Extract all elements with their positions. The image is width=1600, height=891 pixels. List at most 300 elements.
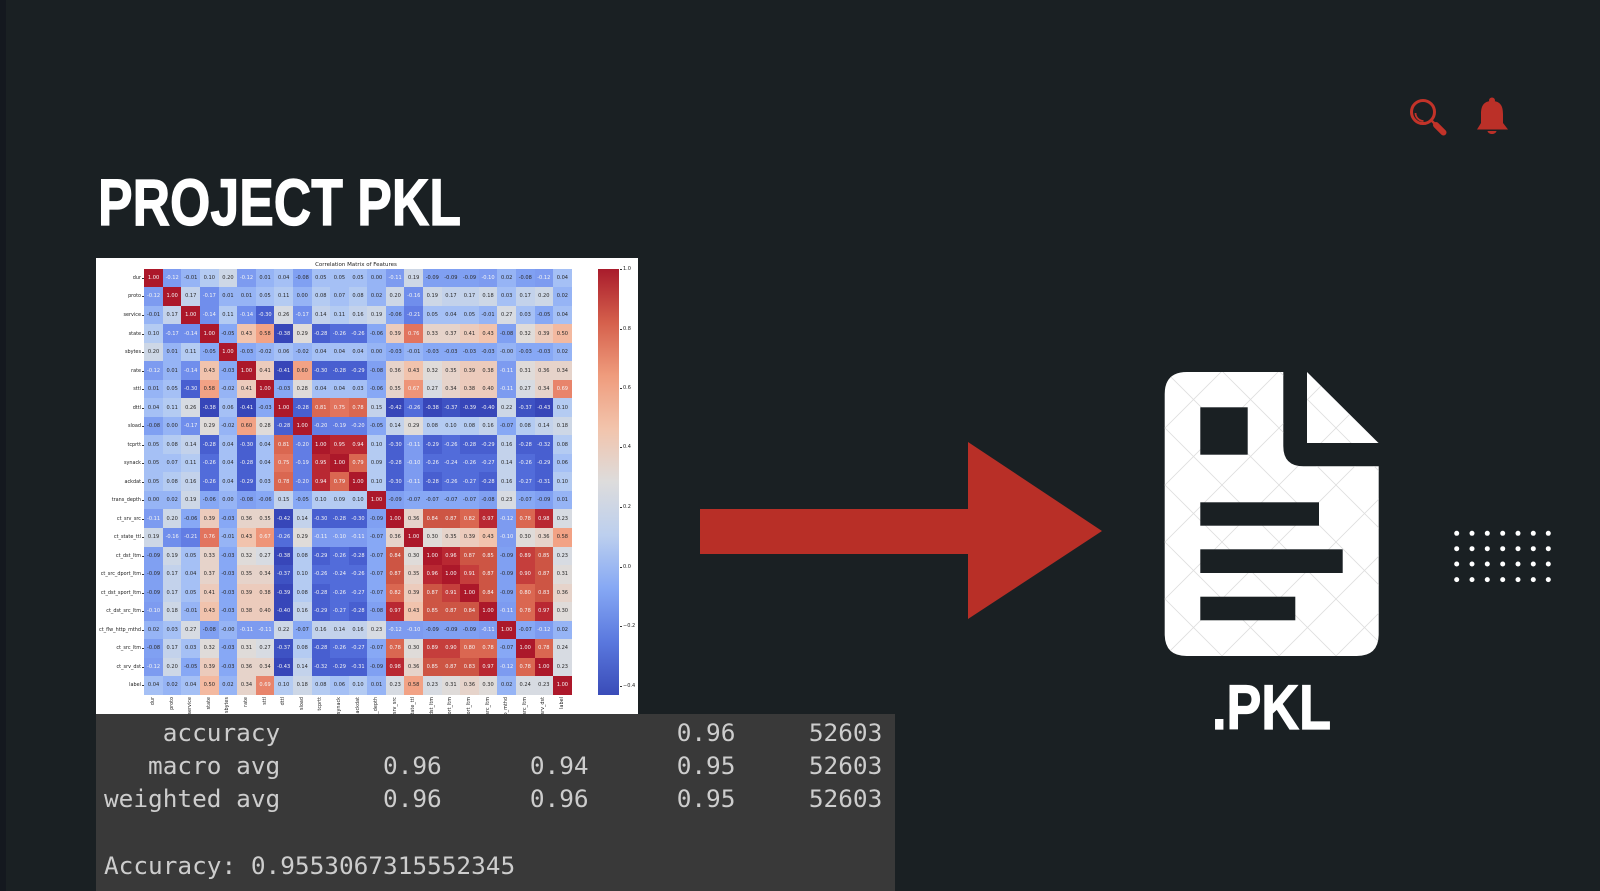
heatmap cells: 0.05 <box>185 553 196 559</box>
heatmap cells: 0.16 <box>501 479 512 485</box>
icon: pkl document <box>1164 372 1379 656</box>
heatmap cells: 0.14 <box>185 442 196 448</box>
heatmap cells: 0.09 <box>334 497 345 503</box>
heatmap cells: 0.04 <box>334 386 345 392</box>
heatmap cells: -0.09 <box>147 590 160 596</box>
heatmap cells: 0.18 <box>166 608 178 614</box>
heatmap cells: 0.08 <box>297 553 308 559</box>
colorbar ticks: 1.0 <box>623 266 631 272</box>
heatmap cells: 0.50 <box>557 330 568 336</box>
heatmap cells: -0.26 <box>277 534 290 540</box>
heatmap cells: 1.00 <box>148 275 159 281</box>
heatmap cells: 0.36 <box>389 534 401 540</box>
heatmap cells: 0.27 <box>259 645 271 651</box>
heatmap cells: 0.10 <box>445 423 457 429</box>
heatmap cells: 0.75 <box>334 405 345 411</box>
heatmap cells: -0.08 <box>481 497 495 503</box>
heatmap cells: -0.08 <box>240 497 253 503</box>
heatmap cells: 0.16 <box>482 423 494 429</box>
row labels: ct_flw_http_mthd <box>99 627 141 633</box>
heatmap cells: 0.84 <box>464 608 475 614</box>
heatmap cells: 0.08 <box>520 423 531 429</box>
heatmap cells: 0.04 <box>278 275 289 281</box>
heatmap cells: 0.17 <box>166 312 178 318</box>
chart title: Correlation Matrix of Features <box>315 262 397 268</box>
heatmap cells: 0.06 <box>278 349 289 355</box>
heatmap cells: 0.36 <box>538 534 549 540</box>
heatmap cells: -0.10 <box>147 608 160 614</box>
heatmap cells: -0.01 <box>184 608 197 614</box>
heatmap cells: 1.00 <box>185 312 196 318</box>
heatmap cells: 0.27 <box>427 386 438 392</box>
colorbar ticks: 0.8 <box>623 326 631 332</box>
heatmap cells: 0.11 <box>278 293 289 299</box>
row labels: state <box>129 330 141 336</box>
heatmap cells: 0.08 <box>315 293 326 299</box>
heatmap cells: -0.42 <box>389 405 402 411</box>
heatmap cells: 0.11 <box>185 349 196 355</box>
heatmap cells: -0.05 <box>203 349 216 355</box>
heatmap cells: 0.87 <box>445 664 457 670</box>
heatmap cells: 1.00 <box>204 330 215 336</box>
heatmap cells: -0.17 <box>184 423 197 429</box>
heatmap cells: 0.32 <box>241 553 252 559</box>
heatmap cells: -0.28 <box>203 442 216 448</box>
heatmap cells: 0.84 <box>482 590 494 596</box>
heatmap cells: -0.06 <box>184 516 197 522</box>
heatmap cells: 0.39 <box>408 590 419 596</box>
heatmap cells: 0.24 <box>520 682 531 688</box>
heatmap cells: -0.07 <box>444 497 457 503</box>
heatmap cells: -0.09 <box>463 275 476 281</box>
heatmap cells: 0.82 <box>389 590 401 596</box>
heatmap cells: -0.07 <box>296 627 309 633</box>
heatmap cells: 0.05 <box>334 275 345 281</box>
heatmap cells: 0.19 <box>185 497 196 503</box>
heatmap cells: -0.26 <box>407 405 420 411</box>
heatmap cells: 0.31 <box>520 368 531 374</box>
heatmap cells: -0.30 <box>314 368 327 374</box>
heatmap cells: 0.20 <box>538 293 549 299</box>
heatmap cells: 0.43 <box>408 608 419 614</box>
heatmap cells: 0.26 <box>185 405 196 411</box>
heatmap cells: 0.16 <box>315 627 326 633</box>
heatmap cells: -0.07 <box>370 571 383 577</box>
heatmap cells: 0.20 <box>166 664 178 670</box>
heatmap cells: 0.05 <box>166 386 178 392</box>
heatmap cells: 0.87 <box>427 590 438 596</box>
heatmap cells: 0.04 <box>148 405 159 411</box>
heatmap cells: -0.37 <box>277 645 290 651</box>
heatmap cells: 0.78 <box>520 664 531 670</box>
heatmap cells: -0.03 <box>221 664 234 670</box>
heatmap cells: 0.36 <box>241 664 252 670</box>
heatmap cells: 0.39 <box>538 330 549 336</box>
heatmap cells: 0.19 <box>166 553 178 559</box>
heatmap cells: 0.14 <box>334 627 345 633</box>
colorbar ticks: 0.4 <box>623 444 631 450</box>
heatmap cells: 0.17 <box>520 293 531 299</box>
heatmap cells: -0.30 <box>351 516 365 522</box>
heatmap cells: -0.39 <box>463 405 476 411</box>
row labels: proto <box>128 293 141 299</box>
heatmap cells: 0.32 <box>204 645 215 651</box>
heatmap cells: 0.03 <box>520 312 531 318</box>
heatmap cells: 1.00 <box>259 386 271 392</box>
heatmap cells: -0.03 <box>221 608 234 614</box>
heatmap cells: 0.04 <box>352 349 364 355</box>
heatmap cells: -0.03 <box>463 349 476 355</box>
heatmap cells: 0.17 <box>185 293 196 299</box>
heatmap cells: 0.04 <box>557 275 568 281</box>
heatmap cells: -0.28 <box>351 553 365 559</box>
heatmap cells: 0.01 <box>148 386 159 392</box>
heatmap cells: -0.21 <box>184 534 197 540</box>
heatmap cells: -0.26 <box>351 330 365 336</box>
heatmap cells: -0.01 <box>147 312 160 318</box>
heatmap cells: -0.11 <box>314 534 327 540</box>
heatmap cells: 1.00 <box>557 682 568 688</box>
heatmap cells: 0.30 <box>557 608 568 614</box>
heatmap cells: 0.00 <box>371 349 382 355</box>
heatmap cells: 0.10 <box>352 497 364 503</box>
row labels: ackdat <box>124 479 141 485</box>
row labels: tcprtt <box>127 442 141 448</box>
heatmap cells: 0.31 <box>241 645 252 651</box>
row labels: ct_srv_dst <box>116 664 141 670</box>
heatmap cells: 0.16 <box>352 627 364 633</box>
heatmap cells: 0.04 <box>334 349 345 355</box>
heatmap cells: 0.39 <box>464 534 475 540</box>
heatmap cells: 0.26 <box>278 312 289 318</box>
heatmap cells: -0.40 <box>277 608 290 614</box>
heatmap cells: -0.09 <box>500 553 513 559</box>
heatmap cells: 0.58 <box>408 682 419 688</box>
heatmap cells: -0.09 <box>426 275 439 281</box>
heatmap cells: 0.03 <box>259 479 271 485</box>
heatmap cells: -0.08 <box>147 645 160 651</box>
heatmap cells: 0.04 <box>557 312 568 318</box>
heatmap cells: -0.29 <box>314 608 327 614</box>
heatmap cells: 0.84 <box>427 516 438 522</box>
heatmap cells: 0.43 <box>241 534 252 540</box>
heatmap cells: -0.28 <box>296 405 309 411</box>
heatmap cells: 0.05 <box>315 275 326 281</box>
heatmap cells: 0.16 <box>501 442 512 448</box>
heatmap cells: 0.23 <box>538 682 549 688</box>
column labels: proto <box>169 697 175 710</box>
heatmap cells: 0.11 <box>222 312 234 318</box>
heatmap cells: -0.03 <box>277 386 290 392</box>
heatmap cells: -0.12 <box>166 275 179 281</box>
heatmap cells: 1.00 <box>389 516 401 522</box>
heatmap cells: 0.04 <box>445 312 457 318</box>
heatmap cells: 0.32 <box>520 330 531 336</box>
heatmap cells: 0.38 <box>464 386 475 392</box>
heatmap cells: 0.37 <box>204 571 215 577</box>
heatmap cells: 0.78 <box>278 479 289 485</box>
heatmap cells: 0.43 <box>204 368 215 374</box>
heatmap cells: 0.58 <box>204 386 215 392</box>
heatmap cells: -0.03 <box>221 516 234 522</box>
heatmap cells: 0.17 <box>445 293 457 299</box>
heatmap cells: 0.41 <box>259 368 271 374</box>
heatmap cells: 1.00 <box>482 608 494 614</box>
heatmap cells: 0.78 <box>352 405 364 411</box>
heatmap cells: 0.83 <box>538 590 549 596</box>
heatmap cells: -0.01 <box>221 534 234 540</box>
heatmap cells: -0.05 <box>537 312 550 318</box>
heatmap cells: -0.29 <box>333 664 346 670</box>
heatmap cells: -0.12 <box>147 368 160 374</box>
decorative dot grid <box>1454 530 1551 582</box>
heatmap cells: 0.35 <box>445 534 457 540</box>
heatmap cells: -0.38 <box>203 405 216 411</box>
heatmap cells: 0.08 <box>557 442 568 448</box>
heatmap cells: 0.67 <box>259 534 271 540</box>
heatmap cells: -0.17 <box>296 312 309 318</box>
heatmap cells: -0.03 <box>537 349 550 355</box>
heatmap cells: -0.03 <box>258 405 272 411</box>
heatmap cells: 0.81 <box>278 442 289 448</box>
heatmap cells: -0.28 <box>389 460 402 466</box>
heatmap cells: -0.06 <box>258 497 272 503</box>
heatmap cells: -0.30 <box>389 442 402 448</box>
heatmap cells: 0.00 <box>148 497 159 503</box>
heatmap cells: 0.80 <box>464 645 475 651</box>
heatmap cells: 0.09 <box>371 460 382 466</box>
column labels: rate <box>243 697 249 707</box>
heatmap cells: 0.87 <box>464 553 475 559</box>
heatmap cells: 0.20 <box>148 349 159 355</box>
heatmap cells: 0.02 <box>557 627 568 633</box>
heatmap cells: 0.43 <box>482 534 494 540</box>
heatmap cells: 0.22 <box>278 627 289 633</box>
heatmap cells: -0.10 <box>500 534 513 540</box>
heatmap cells: 0.36 <box>241 516 252 522</box>
heatmap cells: 0.87 <box>482 571 494 577</box>
heatmap cells: -0.29 <box>351 368 365 374</box>
heatmap cells: 0.85 <box>482 553 494 559</box>
heatmap cells: -0.14 <box>184 330 197 336</box>
heatmap cells: -0.07 <box>500 423 513 429</box>
heatmap cells: -0.26 <box>203 479 216 485</box>
heatmap cells: 0.36 <box>538 368 549 374</box>
heatmap cells: 0.98 <box>389 664 401 670</box>
heatmap cells: 0.04 <box>315 349 326 355</box>
heatmap cells: 0.04 <box>222 479 234 485</box>
left edge strip <box>0 0 6 891</box>
heatmap cells: 0.01 <box>166 349 178 355</box>
heatmap cells: -0.41 <box>277 368 290 374</box>
heatmap cells: 0.20 <box>166 516 178 522</box>
heatmap cells: 0.05 <box>185 590 196 596</box>
heatmap cells: -0.12 <box>537 627 550 633</box>
heatmap cells: -0.09 <box>500 590 513 596</box>
heatmap cells: 0.38 <box>482 368 494 374</box>
heatmap cells: 0.00 <box>297 293 308 299</box>
row labels: sttl <box>133 386 141 392</box>
heatmap cells: 0.04 <box>259 442 271 448</box>
heatmap cells: -0.28 <box>333 516 346 522</box>
heatmap cells: 0.19 <box>371 312 382 318</box>
row labels: ct_dst_ltm <box>116 553 141 559</box>
heatmap cells: 0.89 <box>520 553 531 559</box>
heatmap cells: -0.07 <box>370 553 383 559</box>
heatmap cells: -0.03 <box>444 349 457 355</box>
heatmap cells: 1.00 <box>427 553 438 559</box>
heatmap cells: -0.37 <box>519 405 532 411</box>
heatmap cells: 0.17 <box>464 293 475 299</box>
heatmap cells: -0.28 <box>314 645 327 651</box>
column labels: dur <box>150 697 156 705</box>
heatmap cells: 0.23 <box>557 664 568 670</box>
heatmap cells: 0.29 <box>408 423 419 429</box>
colorbar ticks: 0.0 <box>623 564 631 570</box>
heatmap cells: -0.00 <box>221 627 234 633</box>
heatmap cells: -0.29 <box>240 479 253 485</box>
heatmap cells: -0.08 <box>519 275 532 281</box>
heatmap cells: -0.06 <box>370 330 383 336</box>
heatmap cells: 0.08 <box>427 423 438 429</box>
heatmap cells: 0.08 <box>166 479 178 485</box>
heatmap cells: -0.07 <box>370 534 383 540</box>
colorbar ticks <box>620 266 635 689</box>
row labels: ct_src_ltm <box>116 645 141 651</box>
heatmap cells: -0.11 <box>500 368 513 374</box>
heatmap cells: 0.34 <box>538 386 549 392</box>
heatmap cells: 0.05 <box>148 442 159 448</box>
colorbar ticks: 0.2 <box>623 504 631 510</box>
heatmap cells: 0.00 <box>166 423 178 429</box>
arrow <box>700 442 1102 619</box>
heatmap cells: 0.30 <box>427 534 438 540</box>
heatmap cells: -0.26 <box>351 571 365 577</box>
heatmap cells: 0.07 <box>334 293 345 299</box>
heatmap cells: -0.20 <box>296 442 309 448</box>
heatmap cells: 0.30 <box>482 682 494 688</box>
heatmap cells: -0.12 <box>537 275 550 281</box>
heatmap cells: 0.10 <box>148 330 159 336</box>
heatmap cells: 0.04 <box>315 386 326 392</box>
heatmap cells: 0.76 <box>204 534 215 540</box>
heatmap cells: 0.78 <box>538 645 549 651</box>
heatmap cells: 0.10 <box>278 682 289 688</box>
heatmap cells: -0.07 <box>426 497 439 503</box>
heatmap cells: 0.83 <box>464 664 475 670</box>
heatmap cells: 0.36 <box>389 368 401 374</box>
heatmap cells: 1.00 <box>371 497 382 503</box>
heatmap cells: 0.23 <box>557 553 568 559</box>
heatmap cells <box>144 269 572 695</box>
heatmap cells: -0.38 <box>277 553 290 559</box>
heatmap cells: -0.09 <box>389 497 402 503</box>
column labels: dttl <box>280 697 286 705</box>
heatmap cells: 0.02 <box>166 682 178 688</box>
colorbar ticks: −0.2 <box>623 623 635 629</box>
heatmap cells: 0.76 <box>408 330 419 336</box>
heatmap cells: -0.17 <box>166 330 179 336</box>
heatmap cells: 0.10 <box>557 405 568 411</box>
heatmap cells: -0.30 <box>184 386 197 392</box>
heatmap cells: -0.12 <box>389 627 402 633</box>
heatmap cells: -0.11 <box>407 479 420 485</box>
heatmap cells: 0.16 <box>352 312 364 318</box>
heatmap cells: -0.28 <box>519 442 532 448</box>
row labels: ct_src_dport_ltm <box>101 571 141 577</box>
heatmap cells: -0.17 <box>203 293 216 299</box>
heatmap cells: -0.27 <box>333 608 346 614</box>
row labels: dur <box>133 275 141 281</box>
heatmap cells: -0.01 <box>184 275 197 281</box>
heatmap cells: -0.29 <box>537 460 550 466</box>
heatmap cells: 0.01 <box>166 368 178 374</box>
heatmap cells: 0.14 <box>315 312 326 318</box>
heatmap cells: -0.24 <box>444 460 457 466</box>
heatmap cells: 0.02 <box>501 275 512 281</box>
heatmap cells: -0.28 <box>333 368 346 374</box>
heatmap cells: 0.04 <box>259 460 271 466</box>
heatmap cells: -0.03 <box>221 571 234 577</box>
row labels: sload <box>128 423 141 429</box>
heatmap cells: -0.10 <box>407 627 420 633</box>
heatmap cells: 1.00 <box>241 368 252 374</box>
heatmap cells: 0.78 <box>520 608 531 614</box>
heatmap cells: 0.08 <box>464 423 475 429</box>
heatmap cells: -0.09 <box>370 664 383 670</box>
heatmap cells: 0.19 <box>408 275 419 281</box>
heatmap cells: 0.18 <box>482 293 494 299</box>
heatmap cells: 0.98 <box>538 516 549 522</box>
heatmap cells: 0.18 <box>297 682 308 688</box>
heatmap cells: -0.09 <box>147 553 160 559</box>
heatmap cells: 0.90 <box>520 571 531 577</box>
heatmap cells: 0.23 <box>371 627 382 633</box>
heatmap cells: -0.07 <box>407 497 420 503</box>
heatmap cells: 0.11 <box>166 405 178 411</box>
heatmap cells: -0.28 <box>277 423 290 429</box>
heatmap cells: 0.91 <box>445 590 457 596</box>
heatmap cells: 1.00 <box>445 571 457 577</box>
heatmap cells: -0.26 <box>426 460 439 466</box>
heatmap cells: -0.11 <box>240 627 253 633</box>
heatmap cells: 0.08 <box>297 645 308 651</box>
heatmap cells: -0.26 <box>444 479 457 485</box>
heatmap cells: 0.02 <box>371 293 382 299</box>
heatmap cells: -0.06 <box>370 386 383 392</box>
heatmap cells: -0.27 <box>463 479 476 485</box>
heatmap cells: 0.03 <box>352 386 364 392</box>
heatmap cells: -0.14 <box>184 368 197 374</box>
heatmap cells: 0.14 <box>389 423 401 429</box>
heatmap cells: -0.09 <box>147 571 160 577</box>
heatmap cells: 1.00 <box>464 590 475 596</box>
heatmap cells: 0.23 <box>389 682 401 688</box>
panel: classification report terminal output: accuracy 0.96 52603 macro avg 0.96 0.94 0.95 52603 weighted avg 0.96 0.96 0.95 52603 Accuracy: 0.9553067315552345 <box>104 718 882 880</box>
heatmap cells: -0.11 <box>407 442 420 448</box>
heatmap cells: -0.28 <box>351 608 365 614</box>
heatmap cells: 0.06 <box>557 460 568 466</box>
heatmap cells: 0.19 <box>148 534 159 540</box>
heatmap cells: -0.11 <box>500 386 513 392</box>
heatmap cells: 0.11 <box>185 460 196 466</box>
heatmap cells: 0.07 <box>166 460 178 466</box>
heatmap cells: -0.14 <box>203 312 216 318</box>
row labels: sbytes <box>125 349 141 355</box>
heatmap cells: 0.10 <box>371 479 382 485</box>
row labels: ct_dst_src_ltm <box>106 608 141 614</box>
heatmap cells: -0.11 <box>351 534 365 540</box>
